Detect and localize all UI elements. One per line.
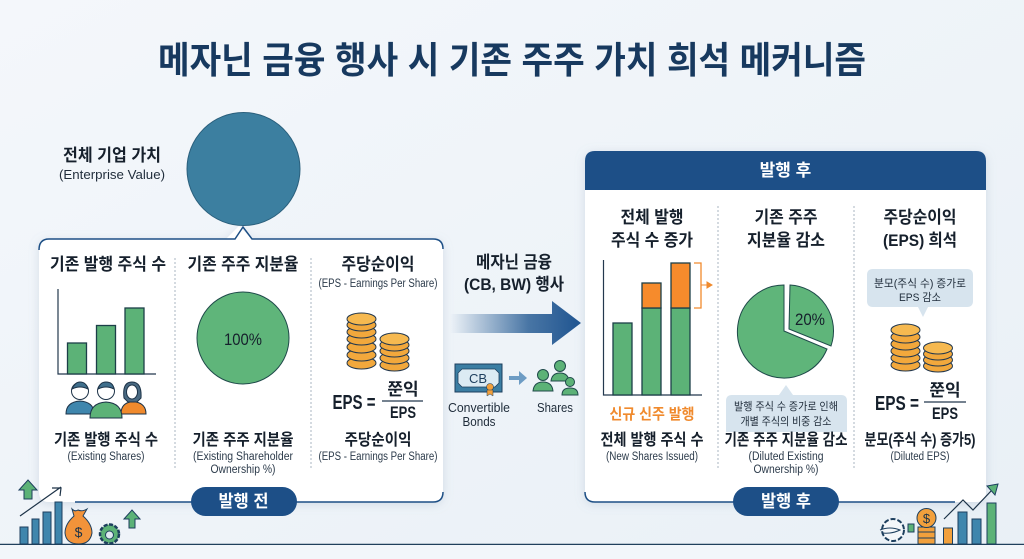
icon: coin stacks	[347, 313, 409, 371]
arrow: bonds to shares	[509, 371, 527, 385]
pill: before	[191, 487, 297, 516]
column: existing shares	[50, 255, 166, 463]
pie: 20 percent	[737, 285, 834, 378]
panel: after issuance	[585, 151, 986, 516]
EPS formula: 쭌익	[929, 381, 961, 400]
callout: dilution note: 발행 주식 수 증가로 인해	[734, 399, 838, 413]
callout: EPS note: EPS 감소	[899, 291, 941, 304]
enterprise value label: (Enterprise Value)	[59, 167, 165, 182]
pill: after: 발행 후	[761, 492, 811, 511]
column: ownership: (Existing Shareholder	[193, 451, 293, 463]
icon: coin stacks	[891, 324, 952, 372]
column: ownership	[188, 255, 298, 476]
icon: three shareholders	[66, 382, 146, 418]
pie: 100 percent: 100%	[224, 330, 262, 349]
callout: dilution note	[726, 385, 847, 432]
column: ownership: 기존 주주 지분율	[192, 431, 294, 449]
EPS formula: EPS =	[332, 392, 376, 414]
enterprise value circle	[187, 112, 300, 226]
column: EPS: (EPS - Earnings Per Share)	[318, 451, 438, 463]
ground line	[0, 544, 1024, 546]
callout: EPS note	[867, 269, 973, 317]
column: total shares increase: (New Shares Issued)	[606, 451, 698, 463]
mezzanine heading: (CB, BW) 행사	[464, 275, 564, 294]
label: convertible bonds: Convertible	[448, 400, 510, 415]
callout: EPS note: 분모(주식 수) 증가로	[874, 277, 966, 290]
column: ownership dilution	[724, 208, 848, 476]
icon: convertible bond: CB	[469, 371, 487, 386]
column: EPS dilution: (EPS) 희석	[883, 231, 957, 250]
label: shares: Shares	[537, 400, 573, 415]
column: total shares increase: 주식 수 증가	[611, 231, 693, 250]
mezzanine heading: 메자닌 금융	[476, 253, 552, 272]
pill: before: 발행 전	[218, 492, 268, 511]
column: EPS dilution	[864, 208, 976, 463]
icon: growth decoration right	[880, 484, 998, 544]
column: EPS: 주당순이익	[342, 255, 414, 274]
label: convertible bonds: Bonds	[462, 414, 496, 429]
column: EPS: 주당순이익	[344, 431, 412, 449]
icon: convertible bond	[455, 364, 502, 396]
EPS formula: 쭌익	[387, 380, 419, 399]
arrow: main flow	[450, 301, 581, 345]
column: total shares increase: 전체 발행	[620, 208, 684, 227]
column: ownership dilution: Ownership %)	[754, 464, 819, 476]
column: ownership dilution: 기존 주주	[754, 208, 818, 227]
column: ownership dilution: 기존 주주 지분율 감소	[724, 431, 848, 449]
column: ownership dilution: 지분율 감소	[747, 231, 825, 250]
column: ownership: 기존 주주 지분율	[188, 255, 298, 274]
panel header text: 발행 후	[760, 161, 811, 180]
icon: growth decoration left	[19, 480, 140, 544]
column: EPS: (EPS - Earnings Per Share)	[318, 278, 438, 290]
bracket arrow: new shares	[694, 263, 712, 308]
enterprise value label	[59, 146, 165, 182]
column: total shares increase: 신규 신주 발행	[610, 406, 694, 423]
column: existing shares: (Existing Shares)	[68, 451, 145, 463]
column: ownership dilution: (Diluted Existing	[748, 451, 824, 463]
column: EPS	[318, 255, 438, 463]
EPS formula	[875, 381, 966, 423]
EPS formula: EPS	[932, 404, 958, 423]
label: dollar sign left: $	[75, 524, 83, 540]
mezzanine heading	[464, 253, 564, 294]
column: total shares increase	[600, 208, 712, 463]
column: EPS dilution: 분모(주식 수) 증가5)	[864, 431, 976, 449]
column: existing shares: 기존 발행 주식 수	[54, 430, 158, 449]
column: ownership: Ownership %)	[210, 464, 276, 476]
EPS formula: EPS	[390, 403, 416, 422]
EPS formula: EPS =	[875, 393, 919, 415]
column: EPS dilution: 주당순이익	[884, 208, 956, 227]
pie: 100 percent	[197, 292, 289, 384]
icon: shares people	[533, 360, 578, 395]
label: dollar sign right: $	[923, 511, 931, 526]
column: total shares increase: 전체 발행 주식 수	[600, 430, 704, 449]
label: convertible bonds	[448, 400, 510, 429]
column: EPS dilution: (Diluted EPS)	[890, 451, 950, 463]
enterprise value label: 전체 기업 가치	[63, 146, 161, 165]
bar chart: existing shares	[58, 289, 156, 374]
callout: dilution note: 개별 주식의 비중 감소	[740, 415, 832, 428]
pill: after	[733, 487, 839, 516]
panel: before issuance	[39, 226, 443, 516]
pie: 20 percent: 20%	[795, 310, 825, 329]
EPS formula	[332, 380, 423, 422]
title: 메자닌 금융 행사 시 기존 주주 가치 희석 메커니즘	[158, 40, 866, 81]
column: existing shares: 기존 발행 주식 수	[50, 255, 166, 274]
stacked bar chart	[604, 260, 702, 395]
